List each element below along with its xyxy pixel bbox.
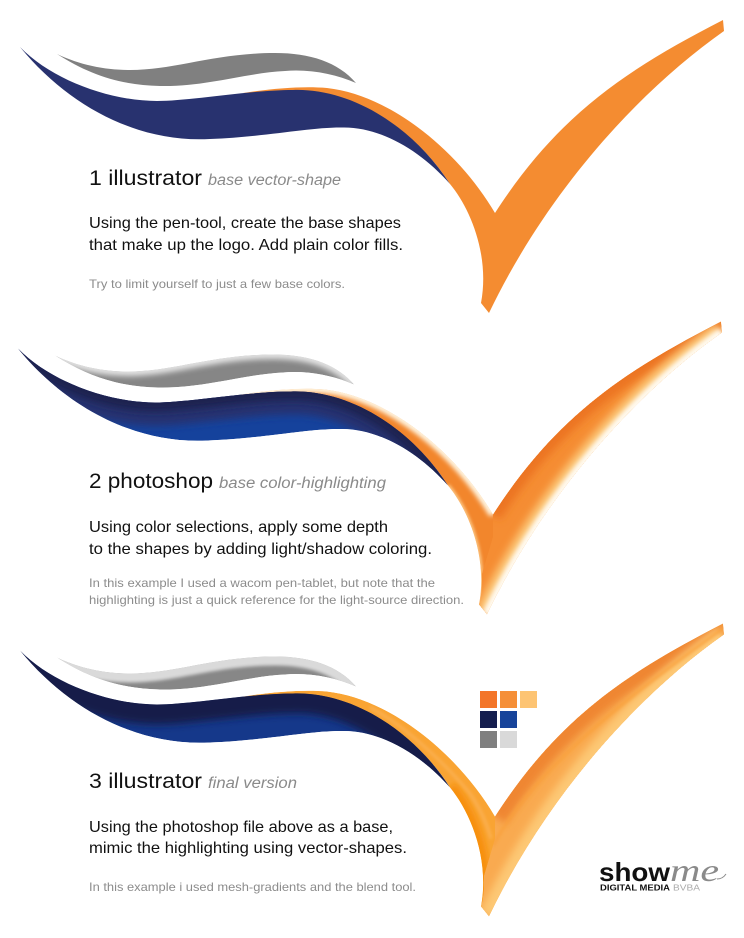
text block: step 1 instructions: that make up the logo. Add plain color fills. [89,237,403,254]
shape: navy swoosh with blue shading [18,348,448,486]
subheading: step 3: final version [208,775,297,792]
text block: step 2 instructions: to the shapes by adding light/shadow coloring. [89,541,432,558]
shape: orange check with mesh gradients [243,624,724,916]
heading: step 3: 3 illustrator [89,769,202,793]
shape: orange check [243,20,724,313]
heading: step 2: 2 photoshop [89,469,213,493]
text block: step 3 instructions [89,819,407,857]
logo: final vector shapes [20,624,724,916]
logo: photoshop highlighted shapes [18,322,722,614]
heading: step 1: 1 illustrator [89,166,202,190]
note: step 2 [89,576,464,607]
shape: gray swoosh with top highlight [55,354,354,388]
logo: showme digital media bvba: show [599,857,671,887]
shape: navy swoosh [20,47,450,184]
shape: gray swoosh with light gradient [57,656,356,690]
note: step 1: Try to limit yourself to just a few base colors. [89,277,345,291]
text block: step 2 instructions: Using color selections, apply some depth [89,519,388,536]
logo: showme digital media bvba [599,852,726,892]
shape: orange check with soft highlights [241,322,722,614]
logo: showme digital media bvba: me [670,852,719,888]
panel: step 1 illustrator base vector-shape [20,20,724,313]
shape: navy swoosh with blue gradient [20,650,450,788]
text block: step 2 instructions [89,519,432,558]
note: step 2: In this example I used a wacom pen-tablet, but note that the [89,576,435,590]
text block: step 1 instructions: Using the pen-tool, create the base shapes [89,215,401,232]
panel: step 2 photoshop base color-highlighting [18,322,722,614]
subheading: step 2: base color-highlighting [219,475,386,492]
panel: step 3 illustrator final version [20,624,726,916]
logo: showme digital media bvba: BVBA [673,882,700,892]
text block: step 1 instructions [89,215,403,254]
text block: step 3 instructions: Using the photoshop file above as a base, [89,819,393,836]
color palette swatches [480,691,537,748]
shape: gray swoosh [57,53,356,86]
text block: step 3 instructions: mimic the highlighting using vector-shapes. [89,840,407,857]
note: step 2: highlighting is just a quick reference for the light-source direction. [89,593,464,607]
logo: flat base shapes [20,20,724,313]
subheading: step 1: base vector-shape [208,172,341,189]
logo: showme digital media bvba: DIGITAL MEDIA [600,882,670,892]
note: step 3: In this example i used mesh-gradients and the blend tool. [89,880,416,894]
